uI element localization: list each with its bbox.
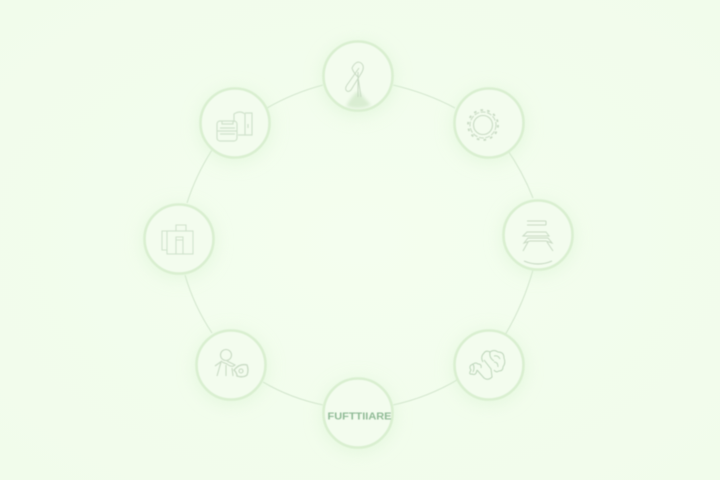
icon: tool [346,62,371,108]
label: FUFTTIIARE [328,412,392,422]
connecting ring [185,85,533,405]
node: bottom right [453,330,525,404]
node: bottom [322,378,394,452]
node: bottom left [195,330,267,404]
icon: figure with bag [215,350,248,377]
node: left [143,204,215,278]
icon: gear [468,110,498,140]
icon: boxes [217,112,252,141]
node: top [322,42,394,115]
icon: leaf cluster [470,350,505,379]
icon: briefcase [162,225,193,254]
icon: stacked tiers [523,221,553,264]
node: top right [453,88,525,162]
node: top left [199,88,271,162]
node: right [502,200,574,274]
